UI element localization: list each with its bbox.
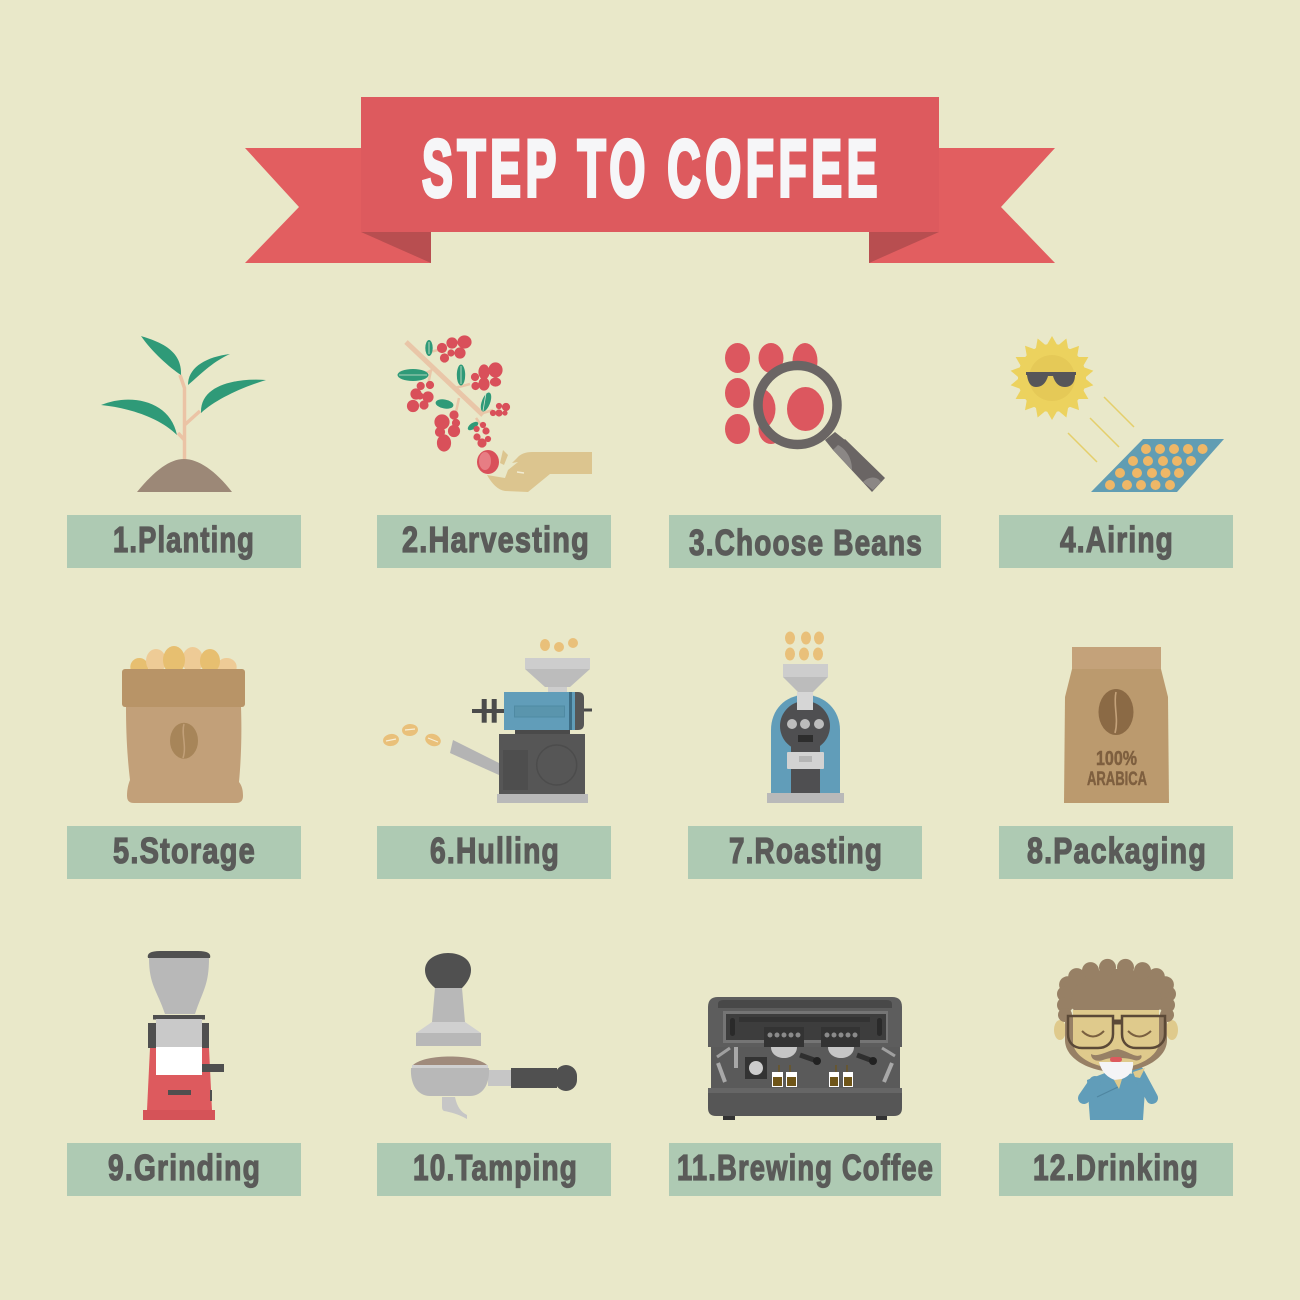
label: roasting: 7.Roasting [729,830,883,871]
label: choose beans [669,515,941,568]
step 1: planting [67,336,301,568]
icon: sun with sunglasses [1011,322,1107,421]
label: grinding: 9.Grinding [108,1147,261,1188]
icon: seedling [101,336,266,492]
label: harvesting [377,515,611,568]
step 8: packaging [999,647,1233,879]
step 4: airing [999,322,1233,568]
icon: man drinking coffee [1054,959,1178,1120]
icon: coffee bag [1064,647,1169,803]
label: planting: 1.Planting [113,519,255,560]
label: brewing coffee [669,1143,941,1196]
icon: coffee bag: 100% [1096,748,1137,770]
step 2: harvesting [377,336,611,568]
icon: sack of beans [122,646,245,803]
step 7: roasting [688,632,922,879]
icon: espresso machine [708,997,902,1120]
icon: coffee branch and hand [398,336,592,492]
label: grinding [67,1143,301,1196]
label: drinking: 12.Drinking [1033,1147,1199,1188]
step 5: storage [67,646,301,879]
label: tamping [377,1143,611,1196]
label: hulling: 6.Hulling [430,830,560,871]
label: drinking [999,1143,1233,1196]
label: roasting [688,826,922,879]
label: brewing coffee: 11.Brewing Coffee [677,1147,934,1188]
step 3: choose beans [669,343,941,568]
icon: beans and magnifier [725,343,885,492]
step 9: grinding [67,951,301,1196]
label: choose beans: 3.Choose Beans [689,522,923,563]
label: planting [67,515,301,568]
step 12: drinking [999,959,1233,1196]
label: airing: 4.Airing [1060,519,1174,560]
title: STEP TO COFFEE [422,124,882,214]
icon: hulled beans [382,723,443,748]
label: packaging: 8.Packaging [1027,830,1207,871]
icon: coffee bag: ARABICA [1087,769,1147,790]
icon: roasting machine [767,632,844,803]
icon: portafilter [411,1056,577,1119]
label: storage: 5.Storage [113,830,256,871]
label: hulling [377,826,611,879]
step 10: tamping [377,953,611,1196]
label: tamping: 10.Tamping [413,1147,578,1188]
icon: drying tray [1091,439,1224,492]
step 6: hulling [377,638,611,879]
icon: sun rays [1068,397,1134,462]
label: storage [67,826,301,879]
title ribbon [245,97,1055,263]
label: packaging [999,826,1233,879]
label: airing [999,515,1233,568]
label: harvesting: 2.Harvesting [402,519,590,560]
icon: tamper [416,953,481,1046]
step 11: brewing coffee [669,997,941,1196]
icon: coffee grinder [143,951,224,1120]
icon: hulling machine [450,638,592,803]
